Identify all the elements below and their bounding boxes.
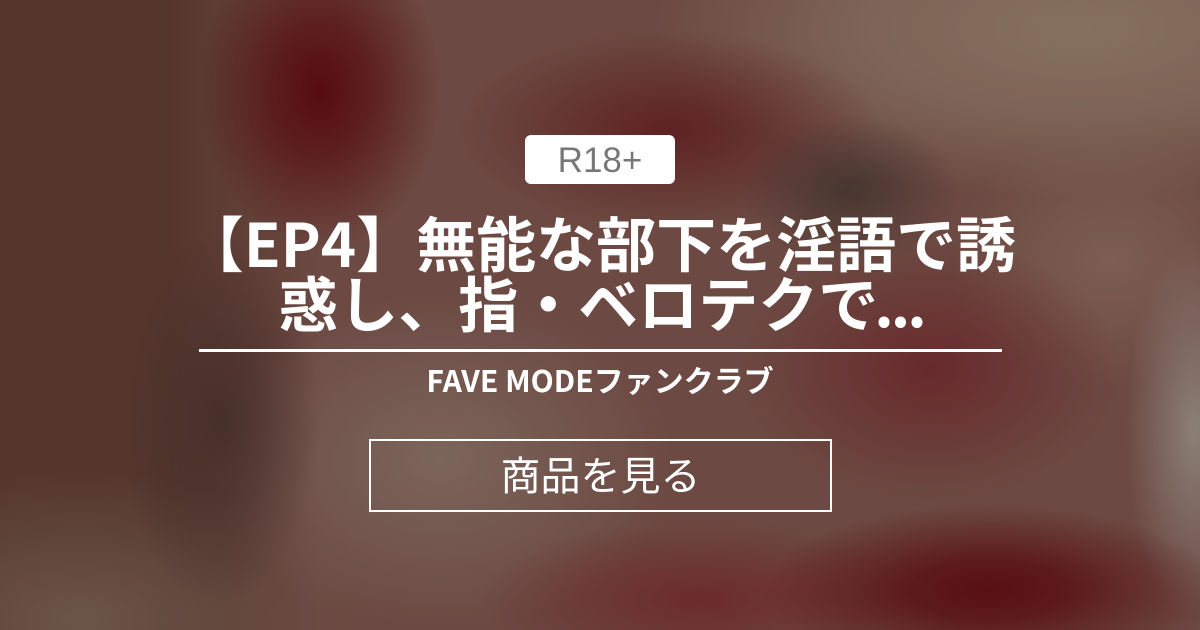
badge: R18+ (525, 135, 675, 184)
button: view product (369, 439, 832, 512)
badge: R18+: R18+ (558, 141, 642, 180)
title (184, 198, 1016, 345)
button: view product: 商品を見る (500, 444, 700, 502)
title: 惑し、指・ベロテクで... (278, 258, 924, 345)
fan club name: FAVE MODEファンクラブ (426, 357, 774, 401)
title: 【EP4】無能な部下を淫語で誘 (184, 198, 1016, 285)
divider line (199, 349, 1002, 352)
